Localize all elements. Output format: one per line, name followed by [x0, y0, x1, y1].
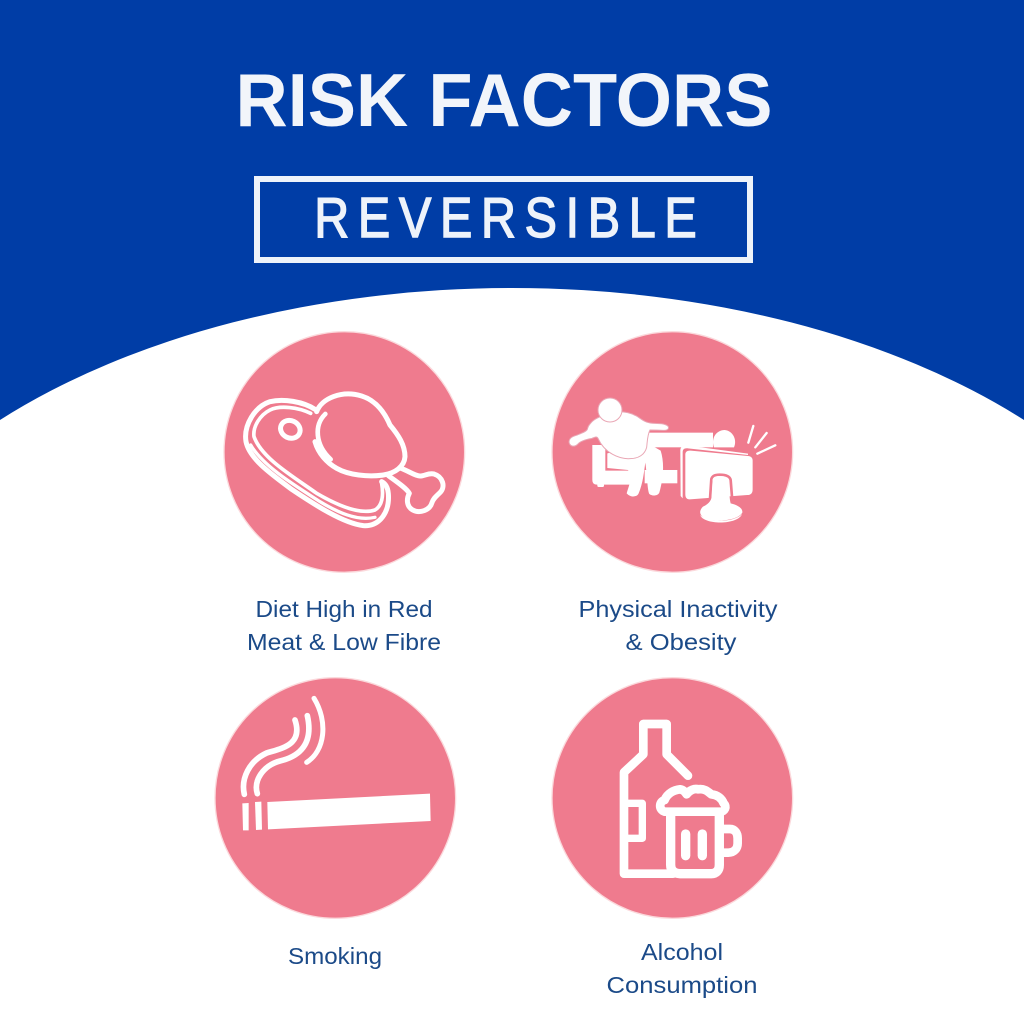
icon: cigarette [215, 678, 456, 918]
label: diet line 2: Meat & Low Fibre [247, 629, 441, 655]
blue header with curved bottom [0, 0, 1024, 420]
icon: bottle and beer mug [552, 678, 793, 918]
subtitle box [257, 179, 750, 260]
subtitle box: REVERSIBLE [314, 186, 697, 250]
label: inactivity: Physical Inactivity [578, 596, 778, 622]
label: alcohol line 2: Consumption [606, 972, 758, 998]
label: inactivity line 2: & Obesity [626, 629, 737, 655]
label: diet: Diet High in Red [256, 596, 432, 622]
title: RISK FACTORS [236, 58, 772, 142]
panel: alcohol [552, 678, 793, 998]
panel: diet [224, 332, 465, 655]
icon: person on sofa with TV [552, 332, 793, 572]
label: smoking: Smoking [288, 943, 382, 969]
label: alcohol: Alcohol [641, 939, 723, 965]
panel: smoking [215, 678, 456, 969]
panel: inactivity [552, 332, 793, 655]
icon: meat and chicken leg [224, 332, 465, 572]
